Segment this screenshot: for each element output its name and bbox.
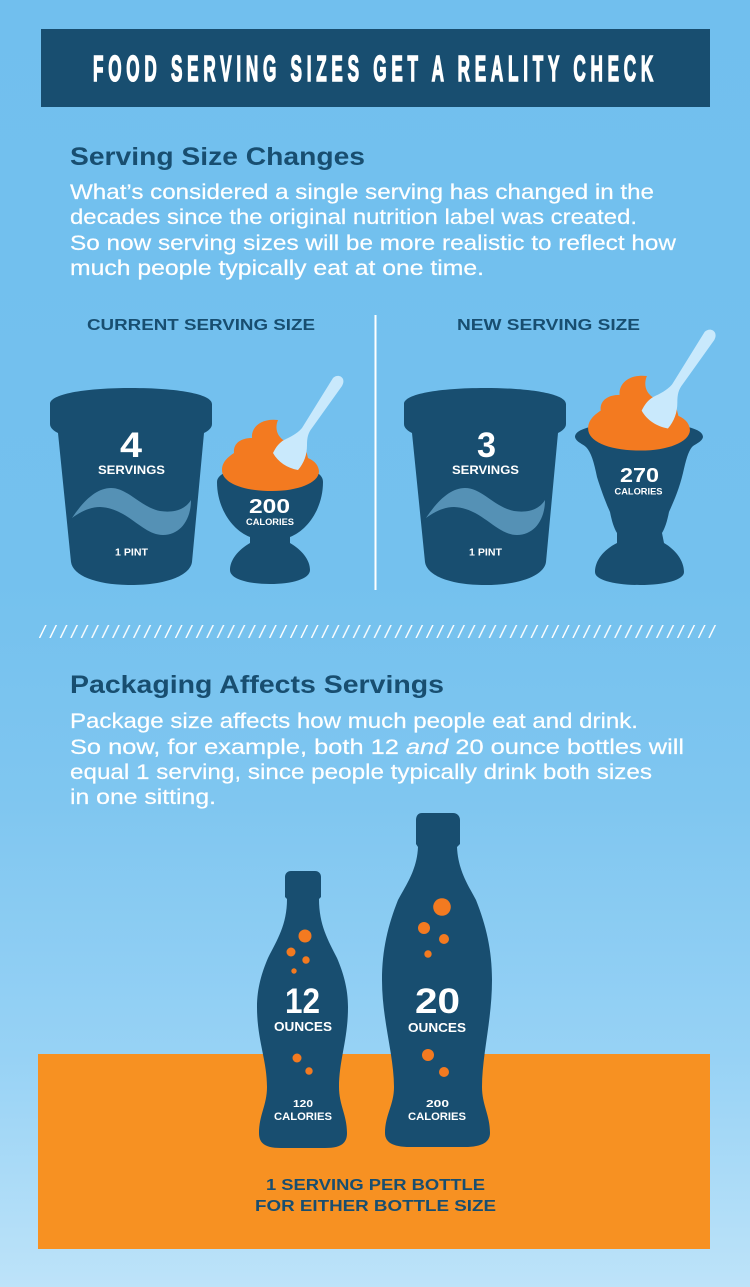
icon: 12 ounce bottle: 12 [285,982,320,1021]
icon: 20 ounce bottle: 20 [415,982,460,1021]
icon: small bowl with ice cream: CALORIES [246,517,294,527]
icon: new pint container: 1 PINT [469,546,503,558]
icon: large sundae glass with ice cream: 270 [620,465,659,487]
icon: current pint container: 1 PINT [115,546,149,558]
icon: current pint container: SERVINGS [98,463,165,477]
text block: packaging explanation: So now, for example, both 12 and 20 ounce bottles will [70,735,684,759]
text block: serving size explanation [70,180,677,280]
text block: serving size explanation: decades since the original nutrition label was created. [70,205,637,229]
text block: packaging explanation: in one sitting. [70,785,216,809]
title banner: FOOD SERVING SIZES GET A REALITY CHECK [93,49,658,90]
icon: 20 ounce bottle [382,813,492,1147]
text block: serving size explanation: So now serving sizes will be more realistic to reflect how [70,231,677,255]
icon: new pint container: SERVINGS [452,463,519,477]
subheading: current serving size: CURRENT SERVING SIZE [87,317,315,334]
text block: serving size explanation: much people typically eat at one time. [70,256,484,280]
callout: 1 serving per bottle: 1 SERVING PER BOTTLE [266,1177,485,1194]
text block: serving size explanation: What’s considered a single serving has changed in the [70,180,654,204]
icon: 20 ounce bottle: OUNCES [408,1021,466,1035]
callout: 1 serving per bottle [255,1177,496,1215]
text block: packaging explanation [70,709,684,809]
icon: new pint container [404,388,566,585]
icon: small bowl with ice cream [217,376,343,584]
icon: small bowl with ice cream: 200 [249,496,290,518]
text block: packaging explanation: Package size affects how much people eat and drink. [70,709,638,733]
icon: large sundae glass with ice cream: CALORIES [614,486,662,496]
icon: 12 ounce bottle: CALORIES [274,1111,332,1123]
heading: serving size changes: Serving Size Changes [70,143,365,171]
icon: 20 ounce bottle: CALORIES [408,1111,466,1123]
icon: 12 ounce bottle: OUNCES [274,1020,332,1034]
icon: current pint container: 4 [120,426,143,465]
panel: orange serving band [38,1054,710,1249]
icon: current pint container [50,388,212,585]
icon: new pint container: 3 [477,426,496,465]
icon: large sundae glass with ice cream [575,330,716,585]
icon: 12 ounce bottle [257,871,348,1148]
icon: 12 ounce bottle: 120 [293,1098,313,1110]
heading: packaging affects servings: Packaging Affects Servings [70,671,444,699]
icon: 20 ounce bottle: 200 [426,1098,449,1110]
text block: packaging explanation: equal 1 serving, since people typically drink both sizes [70,760,652,784]
callout: 1 serving per bottle: FOR EITHER BOTTLE SIZE [255,1198,496,1215]
title banner [41,29,710,107]
subheading: new serving size: NEW SERVING SIZE [457,317,640,334]
